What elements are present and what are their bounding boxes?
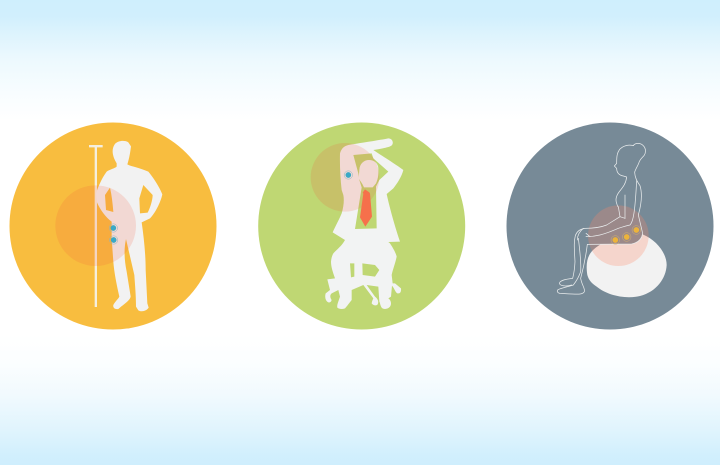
head	[359, 160, 378, 187]
icon: pain point 3	[632, 226, 641, 234]
yellow circle	[10, 122, 216, 330]
panel: woman on exercise ball	[506, 122, 714, 330]
icon: pain point 1	[611, 236, 620, 244]
slate circle	[506, 122, 714, 330]
panel: seated figure arm stretch	[258, 122, 465, 330]
icon: standing man silhouette	[96, 141, 162, 311]
highlight circle	[588, 205, 649, 266]
highlight circle	[55, 185, 136, 266]
icon: pain point lower	[109, 236, 118, 244]
green circle	[258, 122, 465, 330]
icon: pain point	[344, 171, 352, 179]
panel: standing figure	[10, 122, 216, 330]
necktie	[360, 189, 372, 227]
highlight circle	[311, 143, 379, 212]
woman outline	[557, 143, 645, 294]
exercise ball	[587, 234, 667, 297]
seated body fill	[586, 208, 643, 244]
icon: pain point 2	[622, 233, 631, 241]
icon: man on office chair silhouette	[325, 138, 403, 309]
icon: measuring pole	[89, 145, 103, 307]
icon: pain point upper	[109, 224, 117, 232]
